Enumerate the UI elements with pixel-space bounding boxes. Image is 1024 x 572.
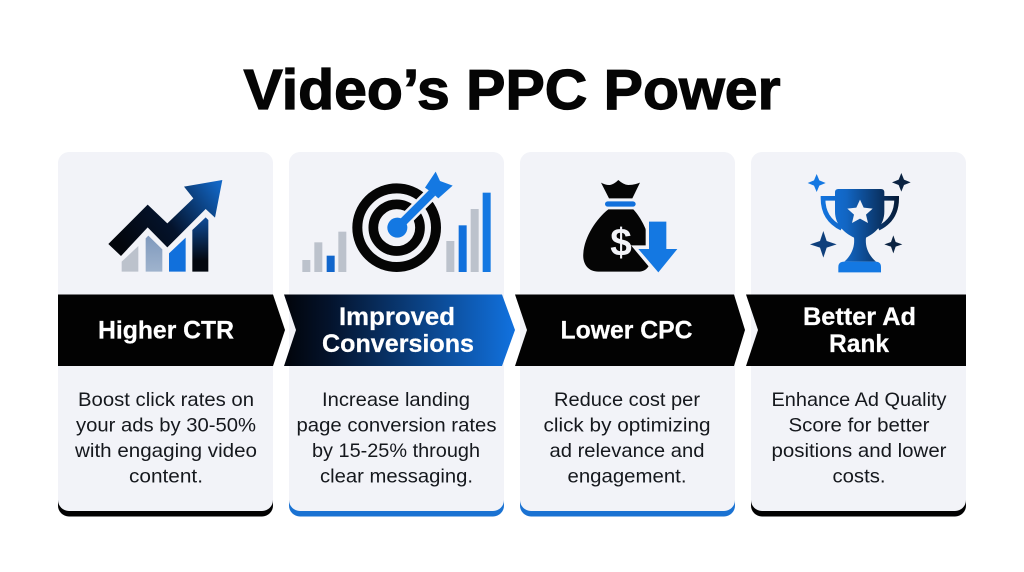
body text: Lower CPC: engagement. — [568, 466, 686, 488]
body text: Better Ad Rank: Enhance Ad Quality — [772, 389, 947, 411]
body text: Better Ad Rank: positions and lower — [772, 440, 947, 462]
card 2 background — [289, 152, 504, 511]
body text: Higher CTR: Boost click rates on — [78, 389, 254, 411]
body text: Improved Conversions — [296, 389, 497, 488]
title: Video’s PPC Power — [244, 58, 780, 122]
icon: money bag with down arrow — [583, 180, 685, 278]
body text: Lower CPC: ad relevance and — [550, 440, 704, 462]
body text: Higher CTR — [74, 389, 257, 488]
body text: Lower CPC: Reduce cost per — [554, 389, 701, 411]
ribbon: Lower CPC: Lower CPC — [560, 316, 692, 344]
body text: Better Ad Rank: costs. — [832, 466, 886, 488]
body text: Improved Conversions: clear messaging. — [320, 466, 473, 488]
body text: Higher CTR: content. — [129, 466, 203, 488]
body text: Better Ad Rank: Score for better — [788, 414, 930, 436]
ribbon: Improved Conversions: Conversions — [322, 330, 474, 358]
ribbon: Higher CTR — [58, 294, 285, 366]
icon: target with arrow — [357, 172, 453, 267]
ribbon: Improved Conversions: Improved — [339, 303, 455, 331]
body text: Improved Conversions: page conversion rates — [296, 414, 497, 436]
body text: Higher CTR: with engaging video — [74, 440, 257, 462]
body text: Improved Conversions: by 15-25% through — [312, 440, 480, 462]
ribbon: Higher CTR: Higher CTR — [98, 316, 234, 344]
body text: Higher CTR: your ads by 30-50% — [76, 414, 256, 436]
panel: Lower CPC — [515, 152, 745, 516]
card 2 accent base — [289, 480, 504, 516]
panel: Improved Conversions — [284, 152, 515, 516]
ribbon: Better Ad Rank — [746, 294, 966, 366]
ribbon: Lower CPC — [515, 294, 745, 366]
ribbon: Improved Conversions — [284, 294, 515, 366]
icon: money bag with down arrow: $ — [610, 221, 632, 264]
card 3 accent base — [520, 480, 735, 516]
ribbon: Better Ad Rank: Better Ad — [803, 303, 916, 331]
icon: trophy with sparkles — [808, 173, 911, 272]
body text: Lower CPC — [544, 389, 710, 488]
body text: Lower CPC: click by optimizing — [544, 414, 710, 436]
panel: Higher CTR — [58, 152, 285, 516]
body text: Better Ad Rank — [772, 389, 947, 488]
card 4 background — [751, 152, 966, 511]
card 3 background — [520, 152, 735, 511]
card 1 accent base — [58, 480, 273, 516]
card 1 background — [58, 152, 273, 511]
icon: left bars — [302, 232, 346, 272]
body text: Improved Conversions: Increase landing — [322, 389, 470, 411]
icon: right bars — [446, 193, 491, 272]
ribbon: Better Ad Rank: Rank — [829, 330, 889, 358]
icon: rising arrow with bars — [108, 180, 222, 272]
panel: Better Ad Rank — [746, 152, 966, 516]
card 4 accent base — [751, 480, 966, 516]
